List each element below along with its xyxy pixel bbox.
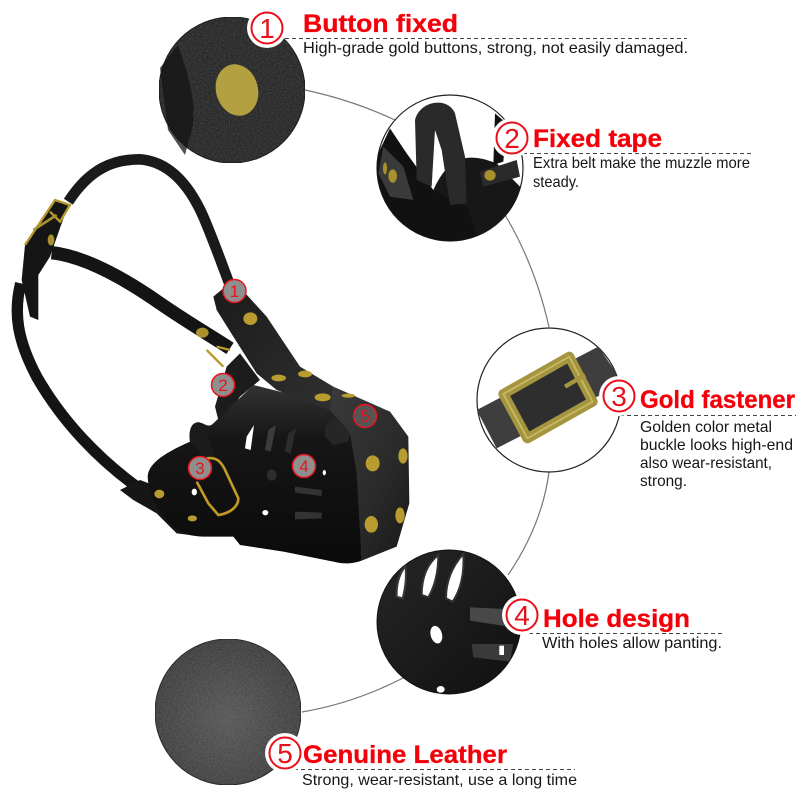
callout 4: hole design bbox=[502, 595, 723, 652]
callout 2: fixed tape bbox=[492, 118, 753, 191]
top strap bbox=[68, 159, 232, 290]
front panel bbox=[330, 387, 409, 561]
side buckle bbox=[197, 458, 238, 515]
detail circle 3: gold fastener bbox=[477, 328, 623, 472]
callout 3: gold fastener: Golden color metal bbox=[640, 419, 772, 436]
marker 5 on muzzle bbox=[354, 404, 376, 428]
callout 1: button fixed: High-grade gold buttons, strong, not easily damaged. bbox=[303, 40, 688, 57]
callout 5: genuine leather: Strong, wear-resistant, use a long time bbox=[302, 772, 577, 789]
marker 3 on muzzle bbox=[188, 456, 212, 480]
marker 1 on muzzle bbox=[223, 280, 246, 302]
marker 3 on muzzle: 3 bbox=[195, 459, 205, 478]
callout 3: gold fastener: also wear-resistant, bbox=[640, 455, 772, 472]
neck strap bbox=[17, 283, 137, 487]
marker 2 on muzzle bbox=[212, 374, 234, 396]
head buckle bbox=[22, 200, 70, 320]
marker 4 on muzzle bbox=[292, 454, 316, 478]
callout 1: button fixed bbox=[247, 8, 688, 57]
callout 1: button fixed: 1 bbox=[259, 13, 275, 44]
callout 3: gold fastener: 3 bbox=[611, 381, 627, 412]
product photo: leather muzzle bbox=[17, 159, 409, 563]
detail circle 4: hole design bbox=[377, 550, 521, 694]
callout 2: fixed tape: steady. bbox=[533, 174, 579, 191]
callout 5: genuine leather: 5 bbox=[277, 738, 293, 769]
callout 2: fixed tape: Fixed tape bbox=[533, 125, 662, 153]
detail circle 2: fixed tape bbox=[377, 95, 523, 243]
side straps and small buckle bbox=[196, 328, 260, 427]
callout 4: hole design: With holes allow panting. bbox=[542, 635, 722, 652]
callout 1: button fixed: Button fixed bbox=[303, 10, 458, 38]
rear flap highlight bbox=[190, 422, 215, 462]
marker 5 on muzzle: 5 bbox=[360, 407, 370, 426]
marker 1 on muzzle: 1 bbox=[230, 282, 239, 301]
callout 3: gold fastener: Gold fastener bbox=[640, 386, 795, 414]
detail circle 1: gold button bbox=[159, 17, 305, 163]
detail circle 5: genuine leather bbox=[155, 639, 301, 785]
rivets bbox=[154, 312, 408, 533]
nose opening bbox=[325, 417, 350, 445]
callout 5: genuine leather bbox=[265, 733, 577, 789]
muzzle body bbox=[148, 385, 362, 563]
nose strap bbox=[213, 280, 333, 412]
callout 5: genuine leather: Genuine Leather bbox=[303, 741, 507, 769]
callout 4: hole design: Hole design bbox=[543, 605, 690, 633]
callout 3: gold fastener bbox=[599, 376, 796, 490]
callout 3: gold fastener: buckle looks high-end bbox=[640, 437, 793, 454]
vent holes bbox=[192, 425, 326, 519]
neck strap end flap bbox=[120, 480, 203, 537]
callout 2: fixed tape: Extra belt make the muzzle more bbox=[533, 155, 750, 172]
lower head strap bbox=[52, 253, 230, 348]
callout 4: hole design: 4 bbox=[514, 600, 530, 631]
marker 4 on muzzle: 4 bbox=[299, 457, 309, 476]
callout 2: fixed tape: 2 bbox=[504, 123, 520, 154]
callout 3: gold fastener: strong. bbox=[640, 473, 687, 490]
marker 2 on muzzle: 2 bbox=[218, 376, 228, 395]
connecting arc bbox=[302, 90, 549, 712]
